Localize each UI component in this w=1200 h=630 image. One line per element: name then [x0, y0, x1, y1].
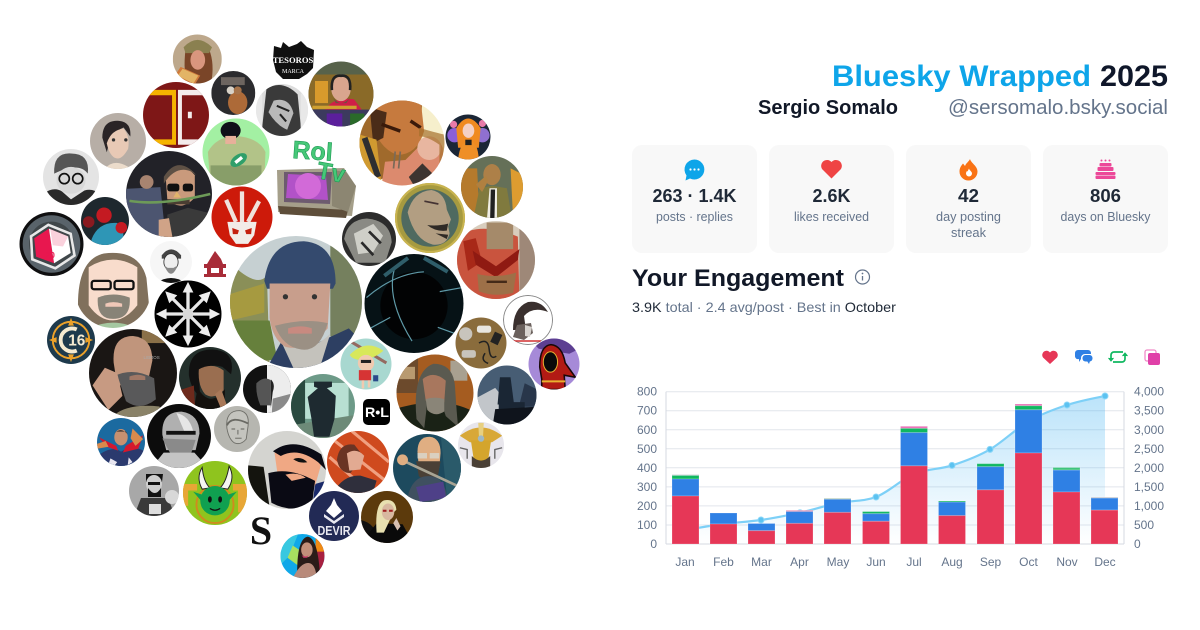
- bar: April: [786, 510, 813, 544]
- avatar: long grey hair man: [396, 354, 474, 432]
- bar: July: [900, 426, 928, 544]
- user handle: @sersomalo.bsky.social: [948, 97, 1168, 119]
- avatar bubble cloud: [19, 34, 579, 578]
- avatar: cartoon child with hat: [340, 338, 392, 390]
- engagement summary: 3.9K total · 2.4 avg/post · Best in October: [632, 299, 896, 315]
- avatar: pencil sketch portrait: [214, 406, 260, 452]
- month labels: Jan: [675, 555, 695, 569]
- left axis labels: 700: [637, 404, 657, 418]
- avatar: R·L logo: R•L: [365, 404, 389, 420]
- avatar: grey sculpture: [342, 212, 396, 266]
- title: Bluesky Wrapped: [832, 60, 1091, 93]
- label: day posting streak: day posting: [936, 210, 1001, 224]
- month labels: Apr: [790, 555, 809, 569]
- label: days on Bluesky: days on Bluesky: [1060, 210, 1151, 224]
- bar: October: [1015, 404, 1042, 544]
- icon: quotes: [1145, 350, 1160, 365]
- left axis labels: 100: [637, 518, 657, 532]
- label: day posting streak: [936, 210, 1001, 240]
- right axis labels: 2,500: [1134, 442, 1164, 456]
- avatar: red skull with swords: [212, 186, 272, 248]
- bar: May: [824, 498, 851, 544]
- avatar: bald bearded man: [89, 329, 177, 417]
- avatar: green jacket: [202, 118, 270, 186]
- left axis labels: 800: [637, 385, 657, 399]
- right axis labels: 3,000: [1134, 423, 1164, 437]
- bar: February: [710, 513, 737, 544]
- avatar: grey woman with glasses: [43, 149, 99, 205]
- avatar: black beard stylized: [248, 431, 326, 509]
- right axis labels: 1,500: [1134, 480, 1164, 494]
- label: day posting streak: streak: [951, 226, 987, 240]
- heading: your engagement: Your Engagement: [632, 265, 844, 292]
- label: posts and replies: posts · replies: [656, 210, 733, 224]
- avatar: game controllers: [456, 318, 506, 368]
- avatar: knight helm: [147, 404, 211, 468]
- area under cumulative line: [685, 396, 1105, 544]
- avatar: cartoon bald bearded man: [393, 434, 461, 502]
- avatar: 16 badge: 16: [68, 332, 85, 349]
- avatar: small red flame logo: [204, 251, 226, 277]
- left axis labels: [637, 385, 657, 551]
- bar: November: [1053, 468, 1080, 544]
- grid lines: [666, 392, 1124, 544]
- avatar: RolTV logo with television: Rol: [292, 136, 334, 167]
- month labels: Feb: [713, 555, 734, 569]
- avatar: stone face medallion: [395, 183, 465, 253]
- avatar: dredd helmet: [457, 221, 535, 299]
- left axis labels: 200: [637, 499, 657, 513]
- avatar: jacket with dog: [211, 71, 255, 115]
- avatar: cartoon long hair man: [75, 252, 151, 328]
- avatar: woman selfie: [280, 534, 324, 578]
- avatar: bald bearded man: LIBROS: [144, 355, 160, 360]
- avatar: orange wood woman: [327, 431, 389, 493]
- month labels: Jul: [906, 555, 922, 569]
- avatar: tesoros logo: TESOROS: [273, 55, 314, 65]
- avatar: golden masked figure: [458, 422, 504, 468]
- avatar: RolTV logo with television: [277, 136, 356, 218]
- avatar: spider hero: [81, 197, 129, 245]
- chart legend: [1042, 350, 1160, 365]
- left axis labels: 400: [637, 461, 657, 475]
- cumulative points: [758, 393, 1108, 523]
- avatar: goat logo: [504, 296, 552, 344]
- right axis labels: 500: [1134, 518, 1154, 532]
- right axis labels: 0: [1134, 537, 1141, 551]
- bar: June: [862, 512, 890, 544]
- avatar: blond vampire: [361, 491, 413, 543]
- right axis labels: [1134, 385, 1164, 551]
- avatar: horseman on mountain: [478, 366, 536, 424]
- avatar: S dragon logo: S: [250, 508, 272, 553]
- avatar: black and white man: [129, 466, 179, 516]
- icon: flame: [960, 159, 978, 180]
- month labels: May: [827, 555, 849, 569]
- value: streak: 42: [958, 186, 979, 206]
- month labels: Nov: [1056, 555, 1078, 569]
- stacked bars: [672, 404, 1118, 544]
- right axis labels: 2,000: [1134, 461, 1164, 475]
- avatar: red hooded wizard: [528, 338, 580, 390]
- avatar: doctor strange parody: [97, 418, 145, 466]
- avatar: streamer: [308, 62, 374, 126]
- avatar: coat man painting: [461, 156, 523, 218]
- avatar: DEVIR logo: [309, 491, 359, 541]
- avatar: R·L logo: [363, 399, 390, 425]
- avatar: man with fake nose glasses: [126, 151, 212, 237]
- engagement chart: [637, 385, 1164, 569]
- avatar: RolTV logo with television: Tv: [315, 157, 348, 189]
- bar: March: [748, 524, 775, 544]
- cumulative line: [685, 396, 1105, 530]
- month labels: Jun: [866, 555, 886, 569]
- icon: likes: [1042, 351, 1058, 364]
- left axis labels: 0: [650, 537, 657, 551]
- left axis labels: 600: [637, 423, 657, 437]
- panel: posts and replies: [632, 145, 757, 253]
- month labels: Oct: [1019, 555, 1038, 569]
- bar: December: [1091, 497, 1118, 544]
- month labels: Sep: [980, 555, 1001, 569]
- panel: likes received: [769, 145, 894, 253]
- left axis labels: 300: [637, 480, 657, 494]
- title: 2025: [1100, 60, 1168, 93]
- avatar: 16 badge: [47, 316, 95, 364]
- panel: days on Bluesky: [1043, 145, 1168, 253]
- avatar: green goblin: [183, 461, 247, 525]
- user name: Sergio Somalo: [758, 97, 898, 119]
- avatar: red E logo: [143, 82, 209, 148]
- avatar: DEVIR logo: DEVIR: [318, 524, 350, 538]
- month labels: Aug: [941, 555, 963, 569]
- avatar: tesoros logo: [273, 41, 314, 79]
- left axis labels: 500: [637, 442, 657, 456]
- avatar: wolverine comic: [360, 100, 444, 186]
- right axis labels: 1,000: [1134, 499, 1164, 513]
- avatar: orange hair illustration: [446, 114, 490, 160]
- avatar: main portrait with blue beanie: [230, 236, 362, 368]
- month labels: Dec: [1094, 555, 1116, 569]
- bar: January: [672, 474, 699, 544]
- avatar: dark silhouette in corridor: [291, 374, 355, 438]
- label: likes received: likes received: [794, 210, 869, 224]
- right axis labels: 4,000: [1134, 385, 1164, 399]
- avatar: woman with hat: [173, 34, 222, 88]
- icon: info: [856, 270, 870, 284]
- right axis labels: 3,500: [1134, 404, 1164, 418]
- icon: birthday cake: [1096, 160, 1116, 179]
- value: posts and replies: 263 · 1.4K: [652, 186, 736, 206]
- avatar: curly hair man: [179, 347, 241, 409]
- avatar: half black and white man: [243, 365, 291, 413]
- avatar: white bearded man drawing: [150, 241, 192, 283]
- avatar: d20 badge: 20: [46, 250, 55, 260]
- avatar: dark sphere: [364, 254, 464, 353]
- avatar: hooded sketch: [256, 84, 308, 136]
- icon: replies: [1075, 350, 1092, 364]
- icon: speech bubble: [684, 160, 704, 180]
- panel: day posting streak: [906, 145, 1031, 253]
- value: likes: 2.6K: [812, 186, 850, 206]
- bar: September: [977, 464, 1004, 544]
- month labels: Mar: [751, 555, 772, 569]
- month labels: [675, 555, 1116, 569]
- avatar: tesoros logo: MARCA: [282, 69, 305, 75]
- bar: August: [938, 501, 966, 544]
- value: days: 806: [1090, 186, 1121, 206]
- avatar: d20 badge: [19, 212, 83, 276]
- avatar: pale woman: [90, 113, 146, 169]
- icon: heart: [821, 160, 842, 178]
- avatar: chaos star: [154, 280, 222, 348]
- icon: reposts: [1108, 352, 1128, 362]
